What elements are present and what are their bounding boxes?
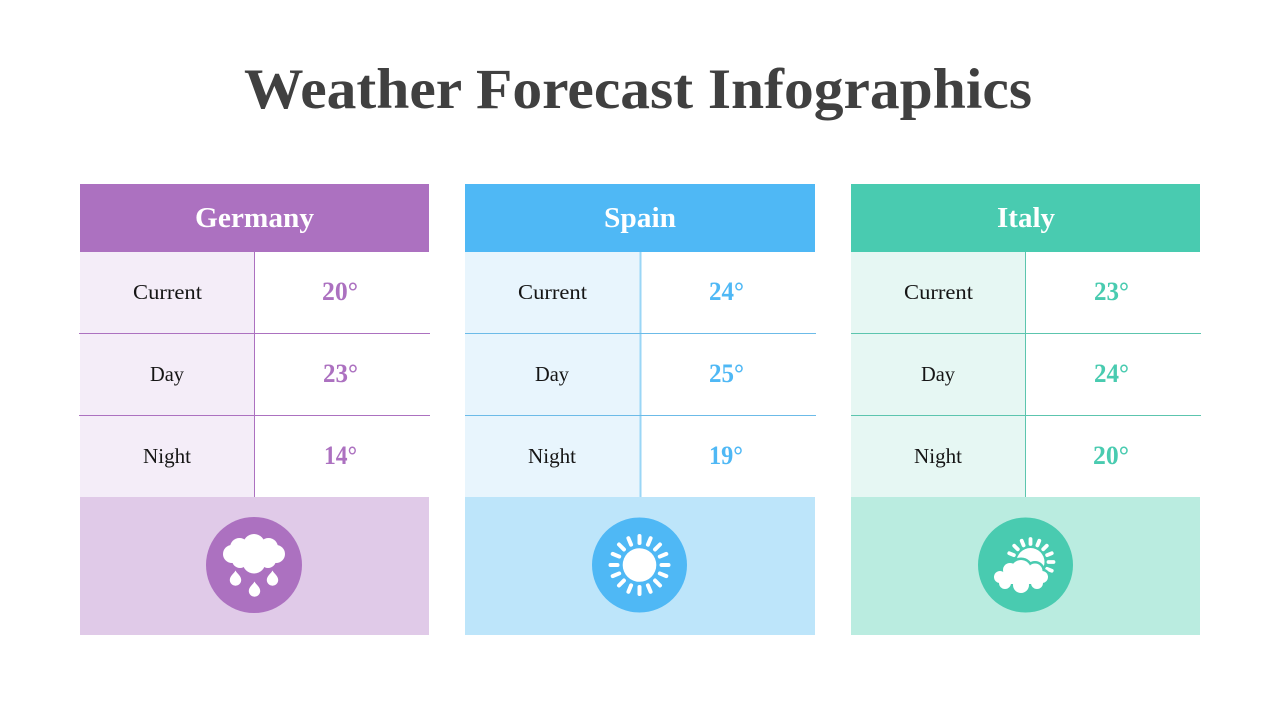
Italy header: Italy	[997, 203, 1055, 234]
Spain current row: 24°	[709, 277, 744, 306]
Spain header	[465, 184, 815, 252]
Germany header	[80, 184, 429, 252]
Spain day row	[535, 359, 744, 388]
Italy header	[851, 184, 1200, 252]
Spain current row	[518, 277, 744, 306]
Italy current row: Current	[904, 280, 973, 304]
Italy night row: 20°	[1093, 441, 1129, 470]
Germany header: Germany	[195, 203, 314, 234]
Spain day row: 25°	[709, 359, 744, 388]
Germany day row: Day	[150, 362, 184, 386]
panel: Spain	[465, 184, 816, 635]
panel: Germany	[79, 184, 430, 635]
Italy current row	[904, 277, 1129, 306]
Italy current row: 23°	[1094, 277, 1129, 306]
Germany night row: Night	[143, 444, 191, 468]
Spain night row	[528, 441, 743, 470]
Germany day row	[150, 359, 358, 388]
panel: Italy	[851, 184, 1201, 635]
title: Weather Forecast Infographics	[244, 58, 1032, 121]
icon: rain cloud	[206, 517, 302, 613]
icon: sun behind cloud	[978, 518, 1073, 612]
Germany night row: 14°	[324, 441, 357, 470]
Italy day row: Day	[921, 362, 955, 386]
Spain night row: 19°	[709, 441, 743, 470]
Italy night row: Night	[914, 444, 962, 468]
Germany current row	[133, 277, 358, 306]
Germany current row: 20°	[322, 277, 358, 306]
Spain current row: Current	[518, 280, 587, 304]
Germany day row: 23°	[323, 359, 358, 388]
Italy day row: 24°	[1094, 359, 1129, 388]
Germany current row: Current	[133, 280, 202, 304]
Italy night row	[914, 441, 1129, 470]
Italy day row	[921, 359, 1129, 388]
Spain day row: Day	[535, 362, 569, 386]
Spain header: Spain	[604, 203, 676, 234]
icon: sun	[592, 518, 687, 612]
Germany night row	[143, 441, 357, 470]
Spain night row: Night	[528, 444, 576, 468]
